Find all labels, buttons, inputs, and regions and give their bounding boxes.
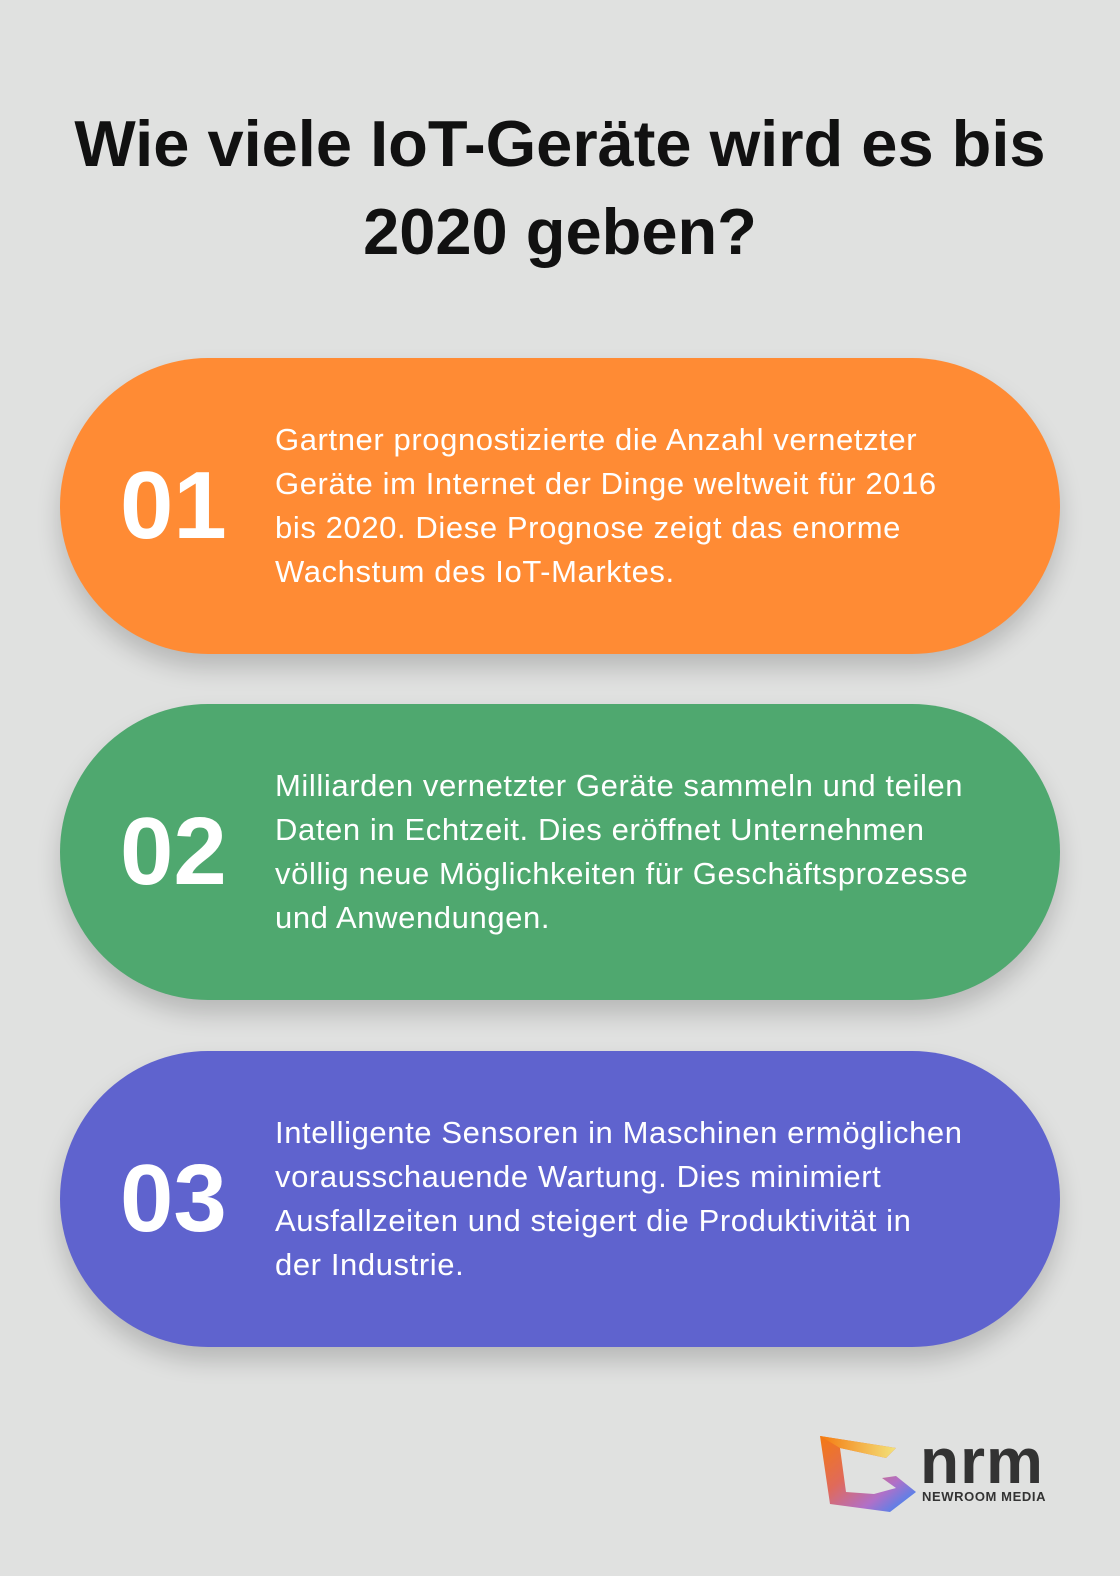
- logo: NEWROOM MEDIA: [922, 1489, 1046, 1504]
- text 02: und Anwendungen.: [275, 900, 550, 935]
- title: 2020 geben?: [363, 195, 757, 268]
- text 01: Geräte im Internet der Dinge weltweit für 2016: [275, 466, 937, 501]
- icon: logo mark: [820, 1436, 916, 1512]
- text 02: Milliarden vernetzter Geräte sammeln und teilen: [275, 768, 963, 803]
- text 02: Daten in Echtzeit. Dies eröffnet Unternehmen: [275, 812, 925, 847]
- panel: 01: [60, 358, 1060, 654]
- text 03: der Industrie.: [275, 1247, 464, 1282]
- panel: 02: [60, 704, 1060, 1000]
- text 03: Intelligente Sensoren in Maschinen ermöglichen: [275, 1115, 963, 1150]
- text 01: bis 2020. Diese Prognose zeigt das enorme: [275, 510, 901, 545]
- text 03: Ausfallzeiten und steigert die Produktivität in: [275, 1203, 911, 1238]
- text 01: [275, 422, 937, 589]
- text 03: [275, 1115, 963, 1282]
- number 03: 03: [120, 1145, 227, 1252]
- panel: 03: [60, 1051, 1060, 1347]
- number 02: 02: [120, 798, 227, 905]
- text 03: vorausschauende Wartung. Dies minimiert: [275, 1159, 881, 1194]
- text 02: völlig neue Möglichkeiten für Geschäftsprozesse: [275, 856, 968, 891]
- logo text: nrm: [920, 1425, 1044, 1497]
- title: Wie viele IoT-Geräte wird es bis: [74, 107, 1046, 180]
- text 01: Gartner prognostizierte die Anzahl vernetzter: [275, 422, 917, 457]
- number 01: 01: [120, 452, 227, 559]
- text 01: Wachstum des IoT-Marktes.: [275, 554, 675, 589]
- text 02: [275, 768, 968, 935]
- logo: [820, 1425, 1046, 1512]
- title: [74, 107, 1046, 268]
